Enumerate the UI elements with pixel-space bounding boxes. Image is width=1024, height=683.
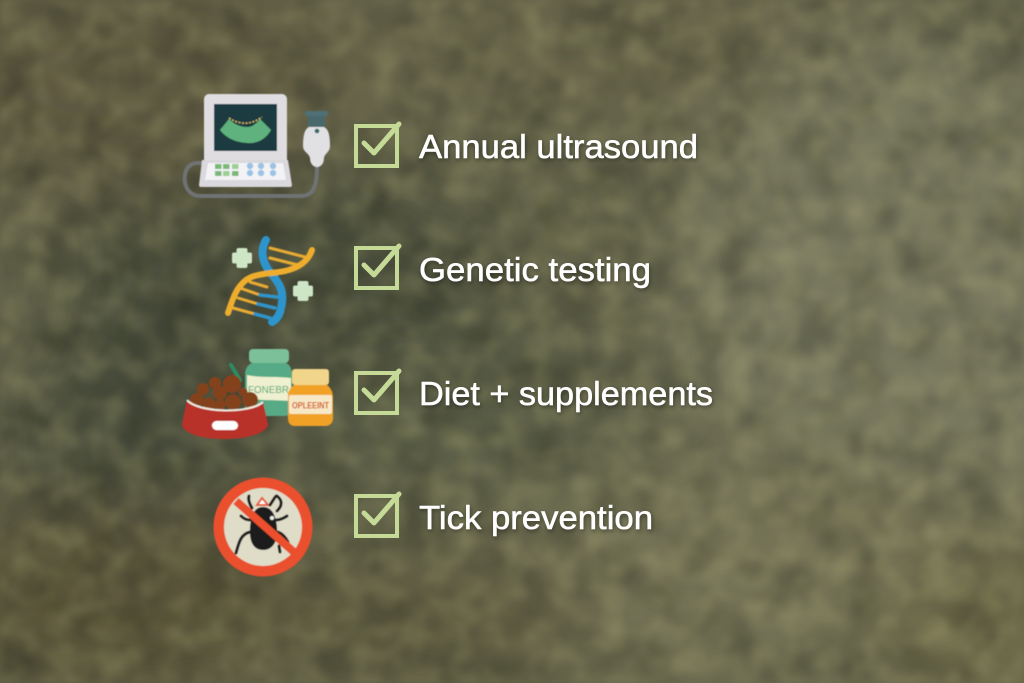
checkbox 1 bbox=[356, 124, 399, 166]
label: diet + supplements: Diet + supplements bbox=[419, 375, 713, 412]
icon: food bowl and supplement jars bbox=[182, 349, 333, 439]
row 4: tick prevention bbox=[214, 478, 653, 576]
row 2: genetic testing bbox=[228, 240, 651, 322]
plus sign left bbox=[232, 248, 252, 268]
label: annual ultrasound: Annual ultrasound bbox=[419, 128, 698, 165]
row 3: diet + supplements bbox=[182, 349, 713, 439]
checkbox 4 bbox=[356, 494, 399, 536]
checkbox 3 bbox=[356, 371, 399, 413]
row 1: annual ultrasound bbox=[185, 94, 698, 196]
icon: food bowl and supplement jars: FONEBR bbox=[248, 385, 289, 396]
label: genetic testing: Genetic testing bbox=[419, 251, 651, 288]
label: tick prevention: Tick prevention bbox=[419, 499, 653, 536]
checkbox 2 bbox=[356, 246, 399, 288]
icon: ultrasound machine bbox=[185, 94, 330, 196]
icon: food bowl and supplement jars: OPLEEINT bbox=[292, 400, 329, 412]
icon: no ticks sign bbox=[214, 478, 312, 576]
plus sign right bbox=[293, 281, 313, 301]
icon: DNA helix bbox=[228, 240, 313, 322]
